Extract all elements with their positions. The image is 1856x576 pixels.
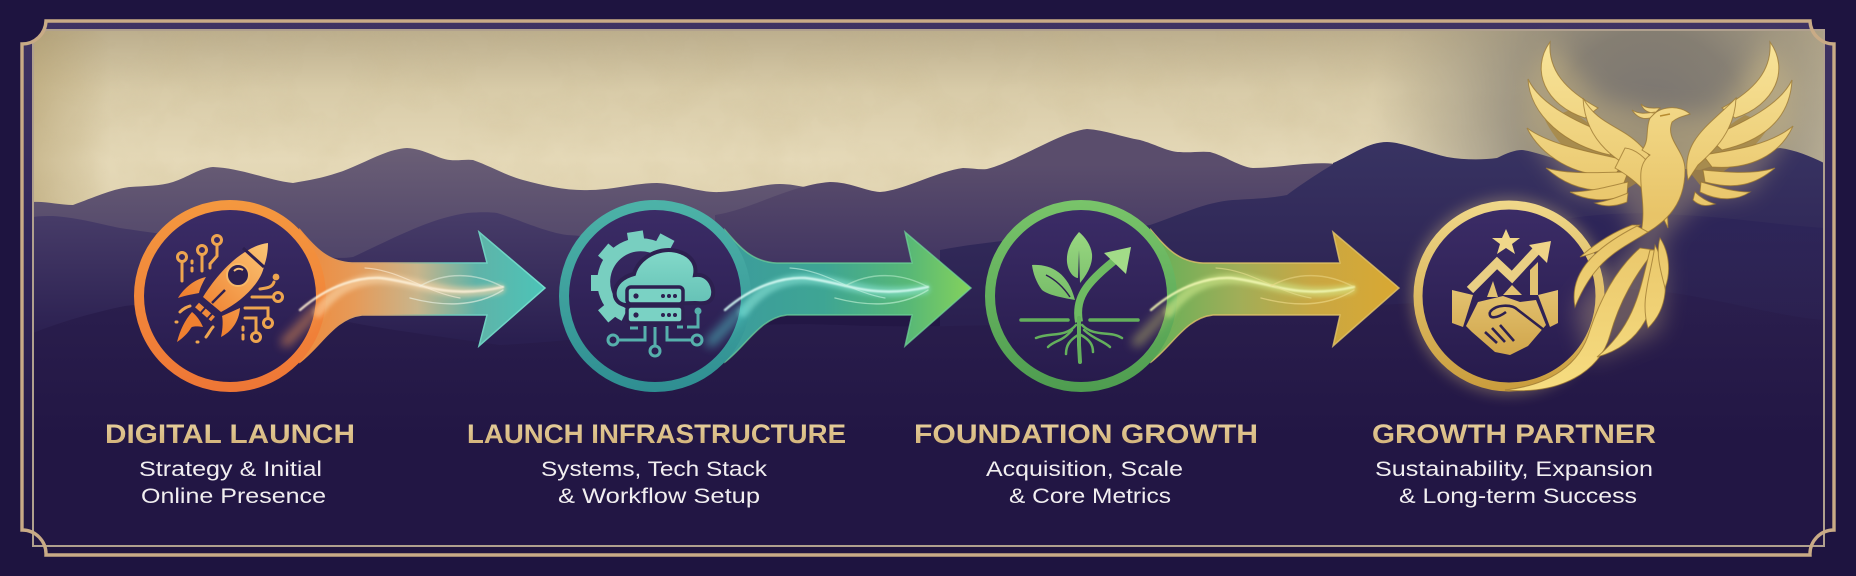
label: growth partner (1372, 419, 1656, 508)
label: foundation growth: & Core Metrics (1009, 485, 1171, 508)
flow wisps 1 (286, 268, 503, 342)
label: foundation growth (914, 419, 1258, 508)
mountains: back ridge (34, 148, 804, 258)
label: growth partner: Sustainability, Expansion (1375, 458, 1653, 481)
parchment sky (34, 31, 1823, 205)
icon: handshake, star and chart (1452, 229, 1558, 355)
flow wisps 2 (711, 268, 928, 342)
ring 4 with glow (1418, 205, 1600, 387)
label: foundation growth: Acquisition, Scale (986, 458, 1183, 481)
phoenix glow (1527, 42, 1793, 360)
arrow 3: green to gold (1151, 230, 1399, 362)
label: launch infrastructure (467, 419, 846, 508)
step 4: growth partner node (1418, 42, 1793, 391)
arrow 1: orange to teal (300, 230, 545, 362)
icon: rocket with circuits (176, 236, 282, 342)
phoenix wing shading (1545, 110, 1770, 190)
arrow 2: teal to green (725, 230, 971, 362)
ring 3 (990, 205, 1172, 387)
mountains: right-central blue ridge (940, 164, 1333, 326)
label: digital launch: Strategy & Initial (139, 458, 322, 481)
label: foundation growth: FOUNDATION GROWTH (914, 419, 1258, 449)
icon: gear cloud server (591, 230, 713, 356)
step 1: digital launch node (139, 205, 545, 387)
flow wisps 3 (1137, 268, 1354, 342)
step 2: launch infrastructure node (564, 205, 971, 387)
label: growth partner: GROWTH PARTNER (1372, 419, 1656, 449)
label: growth partner: & Long-term Success (1399, 485, 1637, 508)
label: digital launch: DIGITAL LAUNCH (105, 419, 355, 449)
ring 2 (564, 205, 746, 387)
label: launch infrastructure: LAUNCH INFRASTRUCTURE (467, 419, 846, 449)
mountains: left ridge (34, 212, 580, 345)
icon: golden phoenix (1505, 42, 1793, 391)
ring 1 (139, 205, 321, 387)
mountains: far-right ridge (1333, 142, 1823, 320)
phoenix feathers (1505, 42, 1793, 391)
panel: landscape scene (34, 31, 1823, 326)
label: launch infrastructure: Systems, Tech Stack (541, 458, 768, 481)
label: digital launch (105, 419, 355, 508)
label: digital launch: Online Presence (141, 485, 326, 508)
mountains: middle ridge (715, 129, 1333, 262)
mountains: front ridges (71, 305, 136, 320)
step 3: foundation growth node (990, 205, 1399, 387)
icon: sprout with roots and arrow (1021, 232, 1138, 362)
label: launch infrastructure: & Workflow Setup (558, 485, 760, 508)
